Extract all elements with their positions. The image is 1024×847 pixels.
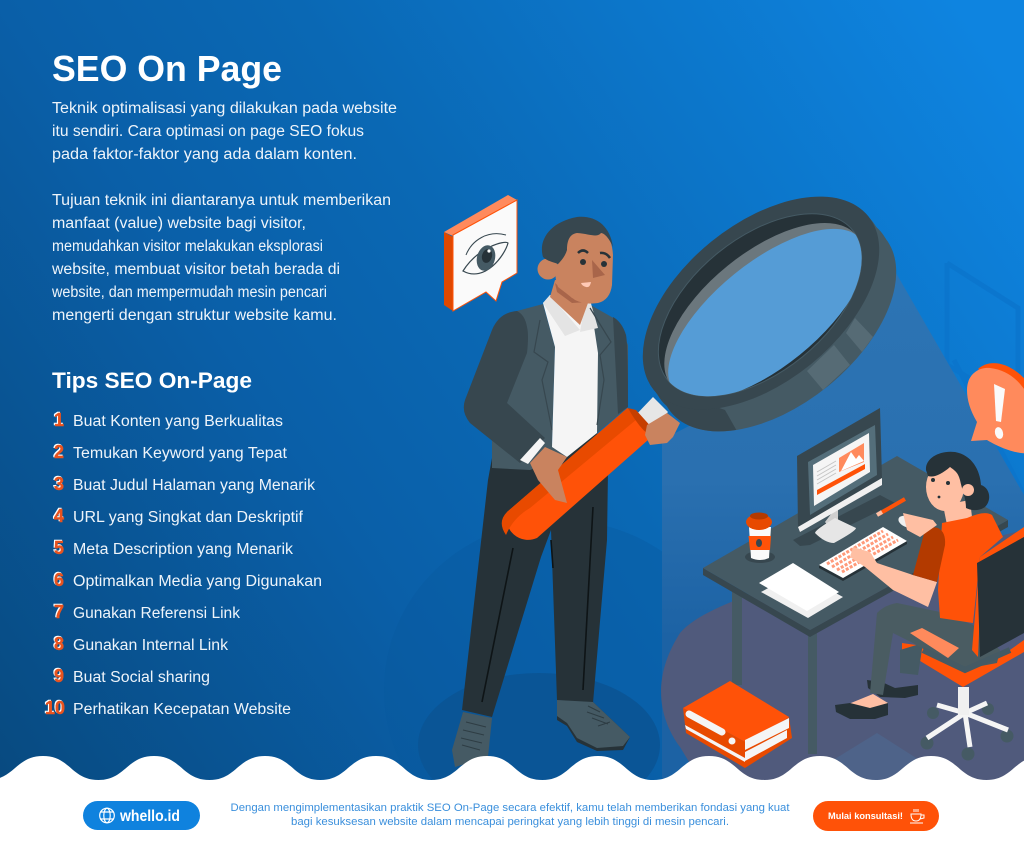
face xyxy=(556,228,613,304)
magnifier depth xyxy=(608,160,935,473)
speech bubble: exclamation xyxy=(967,363,1024,453)
tips heading: Tips SEO On-Page xyxy=(52,368,252,393)
tips list numbers: 8 xyxy=(54,634,64,654)
tips list numbers: 4 xyxy=(54,506,64,526)
papers xyxy=(759,563,843,618)
footer message: Dengan mengimplementasikan praktik SEO On-Page secara efektif, kamu telah memberikan fondasi yang kuat xyxy=(230,802,790,814)
arm support xyxy=(923,650,1010,670)
tips list: Gunakan Internal Link xyxy=(73,637,228,654)
purpose paragraph xyxy=(51,192,391,324)
chair back and armrest xyxy=(910,527,1024,670)
keyboard xyxy=(819,527,907,581)
woman xyxy=(835,452,1003,719)
chair xyxy=(902,640,1024,760)
footer button: consult: Mulai konsultasi! xyxy=(828,811,903,822)
front foot xyxy=(835,694,888,719)
magnifier ferrule xyxy=(633,397,668,432)
mouse xyxy=(897,513,919,531)
man's ground ellipse xyxy=(418,673,660,817)
light cone xyxy=(662,273,1024,780)
icon: coffee cup xyxy=(910,809,924,823)
face xyxy=(926,463,964,511)
purpose paragraph: mengerti dengan struktur website kamu. xyxy=(52,307,337,324)
chair back xyxy=(977,537,1024,657)
depth bands xyxy=(650,318,873,432)
floor tile xyxy=(825,733,935,780)
lower hand xyxy=(530,447,567,503)
tips list numbers: 4 xyxy=(53,505,63,525)
title: SEO On Page xyxy=(52,48,282,89)
ring interior xyxy=(625,178,895,432)
chair back shell xyxy=(972,527,1024,657)
purpose paragraph: website, dan mempermudah mesin pencari xyxy=(51,284,327,301)
tips list: Perhatikan Kecepatan Website xyxy=(73,701,291,718)
cuff xyxy=(520,438,545,464)
intro paragraph xyxy=(52,100,397,163)
intro paragraph: Teknik optimalisasi yang dilakukan pada website xyxy=(52,100,397,117)
armrest xyxy=(910,628,959,658)
tips list numbers: 2 xyxy=(53,441,63,461)
tips list numbers: 10 xyxy=(44,697,64,717)
desk back leg xyxy=(732,590,742,685)
tips list numbers: 3 xyxy=(54,474,64,494)
screen page xyxy=(813,433,870,506)
purpose paragraph: website, membuat visitor betah berada di xyxy=(51,261,340,278)
speech bubble: eye xyxy=(444,195,517,311)
tips list: Gunakan Referensi Link xyxy=(73,605,240,622)
neck xyxy=(550,280,590,325)
handle shade xyxy=(502,408,637,535)
front ring xyxy=(604,155,918,451)
tips list numbers: 1 xyxy=(53,409,63,429)
jacket xyxy=(492,303,628,470)
neck shadow xyxy=(555,283,588,303)
tips list: Buat Judul Halaman yang Menarik xyxy=(73,477,315,494)
tips list numbers xyxy=(44,409,65,718)
hair xyxy=(926,452,989,510)
tips list numbers: 6 xyxy=(54,570,64,590)
trousers xyxy=(462,433,608,717)
footer message xyxy=(230,802,790,828)
chair seat xyxy=(902,640,1024,687)
coffee cup xyxy=(745,512,775,563)
icon: globe xyxy=(100,808,114,823)
purpose paragraph: memudahkan visitor melakukan eksplorasi xyxy=(52,238,323,255)
chair wheels xyxy=(920,703,1014,760)
footer message: bagi kesuksesan website dalam mencapai peringkat yang lebih tinggi di mesin pencari. xyxy=(291,816,729,828)
tips list: Optimalkan Media yang Digunakan xyxy=(73,573,322,590)
tips list: Buat Konten yang Berkualitas xyxy=(73,413,283,430)
pencil xyxy=(877,499,905,515)
neck xyxy=(943,500,972,525)
shirt xyxy=(938,513,1003,623)
illustration: man xyxy=(452,217,630,767)
tips list numbers: 2 xyxy=(54,442,64,462)
tips list: URL yang Singkat dan Deskriptif xyxy=(73,509,304,526)
ear xyxy=(962,484,974,496)
face features xyxy=(578,250,610,287)
floor xyxy=(661,530,1024,780)
footer button: consult xyxy=(813,801,939,831)
chair base xyxy=(927,703,1008,747)
purpose paragraph: manfaat (value) website bagi visitor, xyxy=(52,215,306,232)
right shoe xyxy=(557,700,630,751)
arm xyxy=(850,547,937,607)
legs xyxy=(870,603,1000,695)
footer button: whello.id: whello.id xyxy=(119,808,180,825)
handle xyxy=(506,408,652,540)
hair xyxy=(542,217,613,264)
tips list numbers: 5 xyxy=(53,537,63,557)
intro paragraph: pada faktor-faktor yang ada dalam konten. xyxy=(52,146,357,163)
upper hand xyxy=(903,513,937,537)
monitor shadow xyxy=(793,495,895,546)
desk edge xyxy=(703,520,1008,637)
trouser creases xyxy=(482,507,593,702)
left shoe xyxy=(452,712,492,767)
desk xyxy=(703,456,1008,754)
bottom white wave xyxy=(0,756,1024,847)
tips list numbers: 9 xyxy=(54,666,64,686)
desk top xyxy=(703,456,1008,630)
face features xyxy=(931,478,950,498)
tips list numbers: 9 xyxy=(53,665,63,685)
right jacket side xyxy=(613,317,628,414)
tips list xyxy=(73,413,322,718)
tips list: Temukan Keyword yang Tepat xyxy=(73,445,288,462)
eye icon xyxy=(463,234,508,274)
sleeve xyxy=(913,527,945,582)
magnifier xyxy=(642,196,896,432)
left sleeve xyxy=(464,311,545,463)
tips list numbers: 8 xyxy=(53,633,63,653)
monitor xyxy=(797,408,882,543)
footer button: whello.id xyxy=(83,801,200,830)
tips list numbers: 5 xyxy=(54,538,64,558)
tips list: Buat Social sharing xyxy=(73,669,210,686)
chair stem xyxy=(958,687,969,715)
tips list numbers: 1 xyxy=(54,410,64,430)
stand base xyxy=(815,518,856,543)
tips list numbers: 7 xyxy=(54,602,64,622)
back leg xyxy=(900,643,923,675)
purpose paragraph: Tujuan teknik ini diantaranya untuk memberikan xyxy=(52,192,391,209)
desk front leg xyxy=(808,632,817,754)
ear xyxy=(538,258,558,280)
binders xyxy=(683,681,792,768)
lens glass and wall xyxy=(664,223,862,396)
tips list: Meta Description yang Menarik xyxy=(73,541,293,558)
tips list numbers: 3 xyxy=(53,473,63,493)
shirt xyxy=(543,295,598,457)
man's handle xyxy=(502,408,680,540)
intro paragraph: itu sendiri. Cara optimasi on page SEO fokus xyxy=(52,123,364,140)
window outline xyxy=(947,263,1024,495)
back foot xyxy=(867,680,918,698)
tips list numbers: 6 xyxy=(53,569,63,589)
lapel lines xyxy=(534,308,611,430)
tips list numbers: 7 xyxy=(53,601,63,621)
tips list numbers: 10 xyxy=(45,698,65,718)
right hand xyxy=(645,413,680,445)
stand neck xyxy=(825,505,838,528)
background blob xyxy=(384,520,736,847)
handle ring xyxy=(628,408,654,437)
collar shade xyxy=(543,295,598,336)
